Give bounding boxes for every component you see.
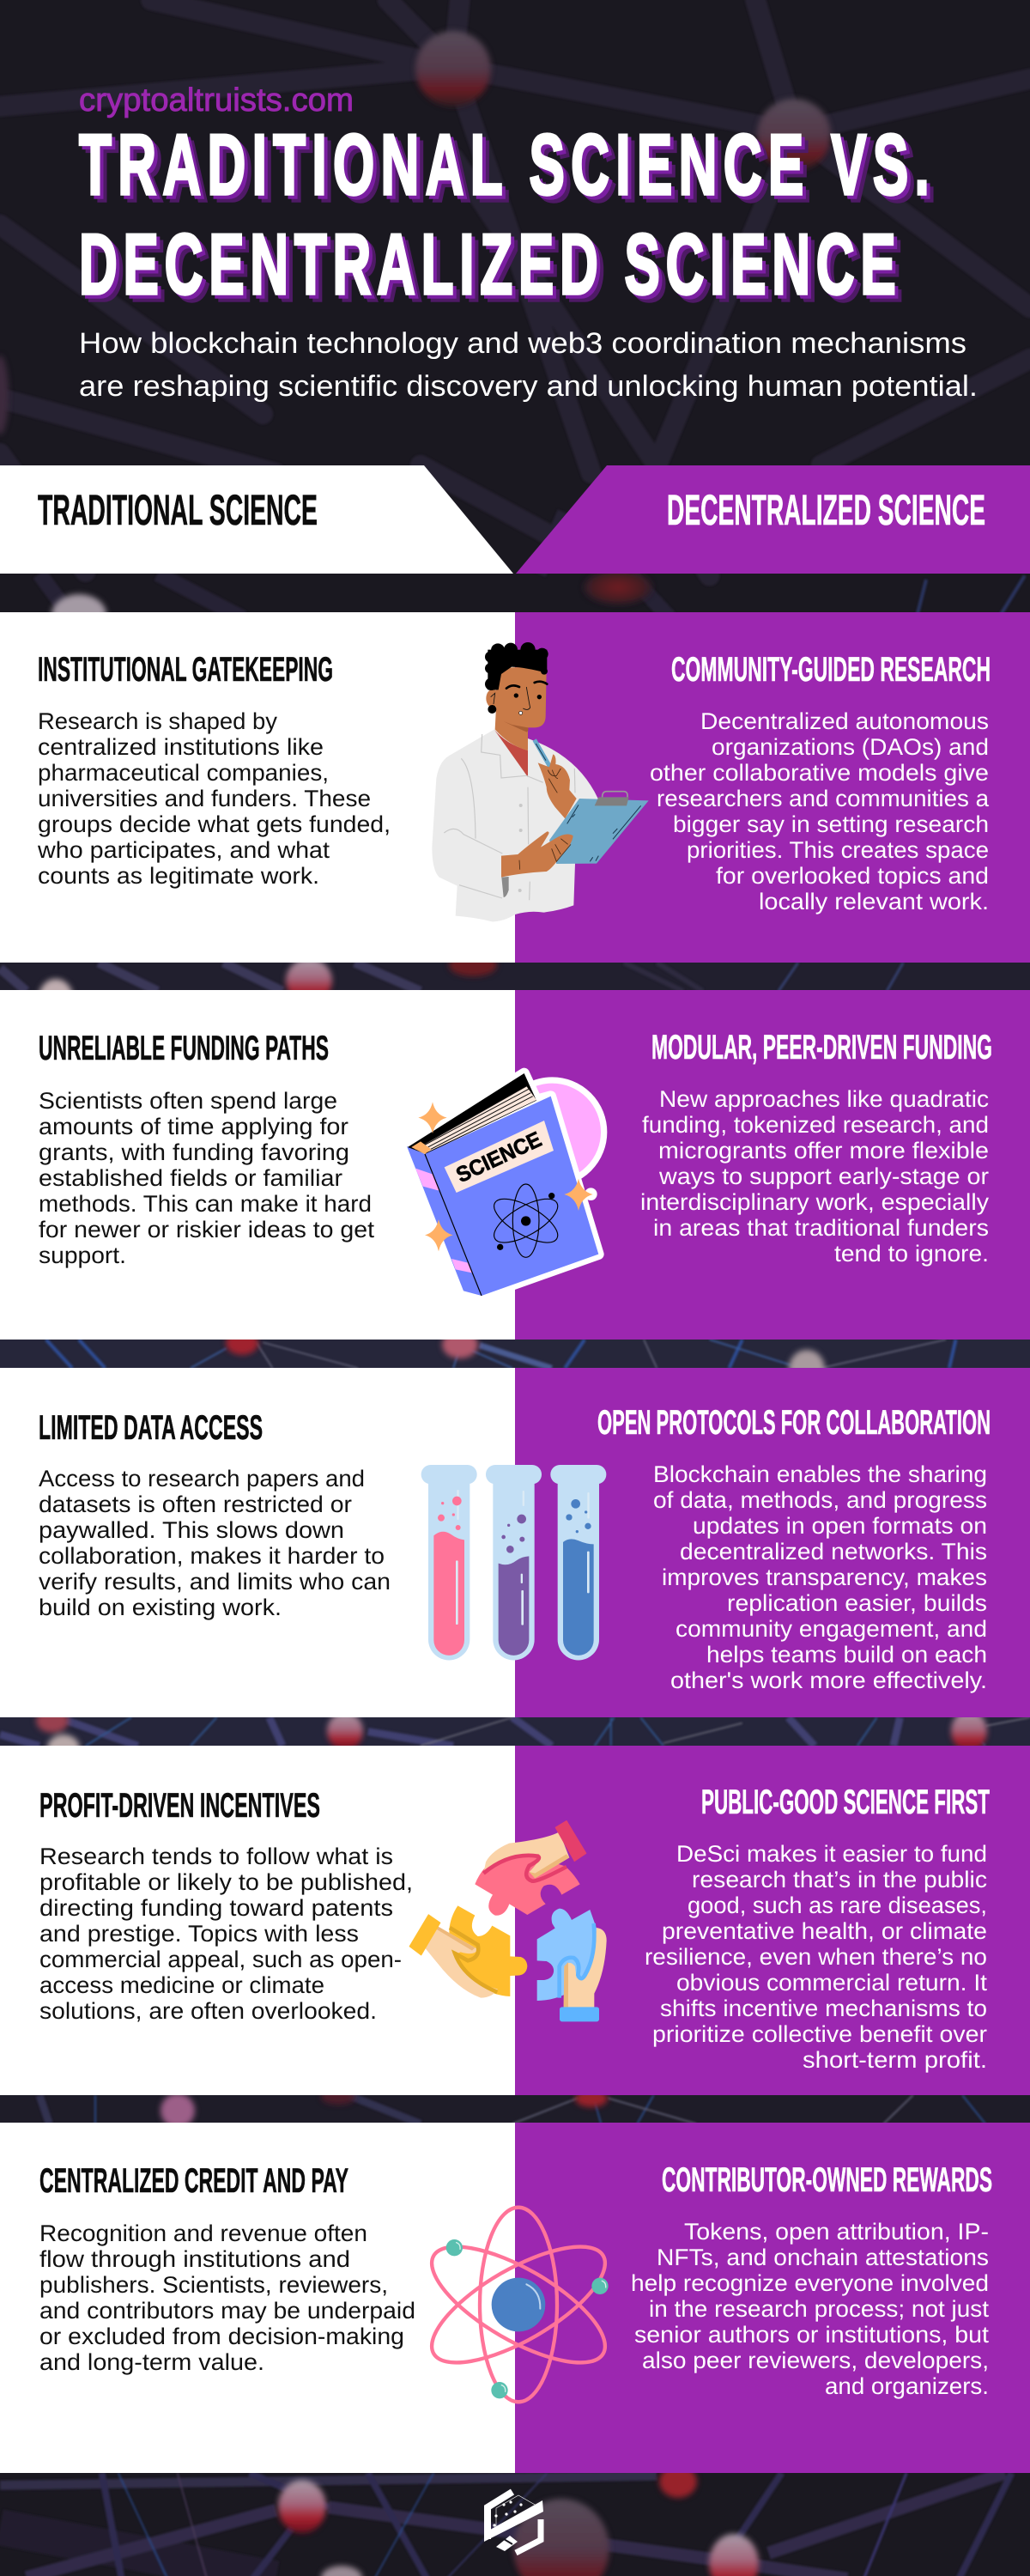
body text — [631, 2219, 990, 2399]
body text: and prestige. Topics with less — [39, 1921, 359, 1947]
body text: collaboration, makes it harder to — [39, 1543, 385, 1569]
website label: cryptoaltruists.com — [79, 82, 354, 118]
body text: verify results, and limits who can — [39, 1569, 391, 1595]
body text: microgrants offer more flexible — [658, 1138, 989, 1163]
body text: NFTs, and onchain attestations — [657, 2245, 989, 2270]
body text: of data, methods, and progress — [653, 1487, 987, 1513]
body text: and contributors may be underpaid — [39, 2298, 415, 2324]
body text: amounts of time applying for — [39, 1114, 348, 1139]
body text: established fields or familiar — [39, 1165, 342, 1191]
test tube: pink — [421, 1465, 477, 1660]
body text: centralized institutions like — [38, 734, 324, 760]
title: DECENTRALIZED SCIENCE — [82, 220, 900, 316]
title: TRADITIONAL SCIENCE VS. — [86, 124, 936, 220]
panel: profit-driven incentives — [0, 1746, 515, 2095]
body text: obvious commercial return. It — [676, 1970, 988, 1996]
body text: improves transparency, makes — [662, 1564, 987, 1590]
body text: build on existing work. — [39, 1595, 282, 1620]
body text: prioritize collective benefit over — [652, 2021, 987, 2047]
heading: INSTITUTIONAL GATEKEEPING — [38, 651, 333, 689]
body text: and organizers. — [825, 2373, 989, 2399]
body text: universities and funders. These — [38, 786, 371, 811]
body text — [645, 1841, 988, 2073]
body text — [37, 708, 391, 889]
body text: other collaborative models give — [650, 760, 989, 786]
icon: science book: SCIENCE — [452, 1127, 545, 1188]
column header: decentralized science — [516, 465, 1030, 574]
body text: Access to research papers and — [39, 1466, 365, 1492]
body text: Recognition and revenue often — [39, 2221, 367, 2246]
body text: flow through institutions and — [39, 2246, 350, 2272]
body text: Research is shaped by — [38, 708, 278, 734]
body text: paywalled. This slows down — [39, 1517, 344, 1543]
body text: in areas that traditional funders — [653, 1215, 989, 1241]
title: DECENTRALIZED SCIENCE — [79, 216, 896, 313]
column header: traditional science: TRADITIONAL SCIENCE — [38, 486, 318, 534]
body text — [39, 2221, 415, 2375]
icon: scientist with clipboard — [432, 642, 649, 921]
subtitle: are reshaping scientific discovery and unlocking human potential. — [79, 370, 978, 403]
body text: counts as legitimate work. — [38, 863, 319, 889]
body text: New approaches like quadratic — [659, 1086, 989, 1112]
body text: resilience, even when there’s no — [645, 1944, 987, 1970]
panel: centralized credit and pay — [0, 2123, 515, 2473]
body text: for newer or riskier ideas to get — [39, 1217, 375, 1242]
body text: Research tends to follow what is — [39, 1844, 393, 1869]
title: TRADITIONAL SCIENCE VS. — [79, 117, 930, 213]
body text: also peer reviewers, developers, — [642, 2348, 989, 2373]
body text: preventative health, or climate — [662, 1918, 987, 1944]
body text: shifts incentive mechanisms to — [660, 1996, 987, 2021]
body text: other's work more effectively. — [670, 1668, 987, 1693]
subtitle — [79, 327, 978, 403]
body text: research that’s in the public — [692, 1867, 987, 1893]
body text: updates in open formats on — [693, 1513, 987, 1539]
body text: Decentralized autonomous — [700, 708, 989, 734]
icon: science book — [406, 1073, 604, 1296]
panel: community-guided research — [515, 612, 1030, 963]
heading: PROFIT-DRIVEN INCENTIVES — [39, 1787, 320, 1825]
body text: replication easier, builds — [727, 1590, 987, 1616]
body text: tend to ignore. — [834, 1241, 989, 1267]
body text: for overlooked topics and — [716, 863, 989, 889]
panel: public-good science first — [515, 1746, 1030, 2095]
body text: profitable or likely to be published, — [39, 1869, 413, 1895]
body text: short-term profit. — [803, 2047, 987, 2073]
body text: senior authors or institutions, but — [634, 2322, 990, 2348]
test tube: purple — [486, 1465, 542, 1660]
body text: bigger say in setting research — [673, 811, 989, 837]
body text: funding, tokenized research, and — [642, 1112, 989, 1138]
body text: methods. This can make it hard — [39, 1191, 372, 1217]
body text: access medicine or climate — [39, 1972, 324, 1998]
test tube: blue — [550, 1465, 606, 1660]
body text — [39, 1088, 375, 1268]
body text: in the research process; not just — [649, 2296, 990, 2322]
body text — [653, 1461, 987, 1693]
body text: publishers. Scientists, reviewers, — [39, 2272, 388, 2298]
title: DECENTRALIZED SCIENCE — [86, 223, 903, 319]
body text: directing funding toward patents — [39, 1895, 393, 1921]
title — [79, 117, 936, 319]
title: TRADITIONAL SCIENCE VS. — [82, 120, 933, 216]
panel: institutional gatekeeping — [0, 612, 515, 963]
panel: limited data access — [0, 1368, 515, 1717]
body text: interdisciplinary work, especially — [640, 1189, 990, 1215]
body text: and long-term value. — [39, 2349, 264, 2375]
body text — [650, 708, 990, 914]
body text — [39, 1466, 391, 1620]
panel: contributor-owned rewards — [515, 2123, 1030, 2473]
body text: grants, with funding favoring — [39, 1139, 349, 1165]
puzzle piece and hand: pink — [475, 1821, 586, 1916]
panel: modular, peer-driven funding — [515, 990, 1030, 1340]
body text: priorities. This creates space — [687, 837, 989, 863]
heading: UNRELIABLE FUNDING PATHS — [39, 1030, 329, 1067]
body text: DeSci makes it easier to fund — [676, 1841, 987, 1867]
heading: LIMITED DATA ACCESS — [39, 1409, 263, 1447]
panel: open protocols for collaboration — [515, 1368, 1030, 1717]
body text: community engagement, and — [676, 1616, 987, 1642]
icon: three test tubes — [421, 1465, 606, 1660]
body text: decentralized networks. This — [680, 1539, 987, 1564]
body text: locally relevant work. — [759, 889, 989, 914]
icon: hands with puzzle pieces — [409, 1821, 607, 2021]
footer logo — [484, 2492, 543, 2553]
body text: commercial appeal, such as open- — [39, 1947, 402, 1972]
body text: good, such as rare diseases, — [688, 1893, 987, 1918]
body text: pharmaceutical companies, — [38, 760, 329, 786]
body text: Scientists often spend large — [39, 1088, 337, 1114]
body text: organizations (DAOs) and — [712, 734, 989, 760]
puzzle piece and hand: blue — [537, 1909, 607, 2021]
icon: atom — [415, 2208, 621, 2402]
body text: helps teams build on each — [706, 1642, 987, 1668]
subtitle: How blockchain technology and web3 coordination mechanisms — [79, 327, 966, 360]
body text — [39, 1844, 413, 2024]
body text: or excluded from decision-making — [39, 2324, 404, 2349]
body text: who participates, and what — [37, 837, 330, 863]
puzzle piece and hand: yellow — [409, 1905, 527, 1998]
body text: ways to support early-stage or — [658, 1163, 989, 1189]
body text: solutions, are often overlooked. — [39, 1998, 377, 2024]
body text — [640, 1086, 990, 1267]
column header: traditional science — [0, 465, 513, 574]
body text: datasets is often restricted or — [39, 1492, 352, 1517]
body text: researchers and communities a — [657, 786, 990, 811]
body text: Tokens, open attribution, IP- — [684, 2219, 989, 2245]
body text: help recognize everyone involved — [631, 2270, 989, 2296]
body text: Blockchain enables the sharing — [653, 1461, 987, 1487]
heading: CENTRALIZED CREDIT AND PAY — [39, 2162, 348, 2200]
body text: support. — [39, 1242, 126, 1268]
body text: groups decide what gets funded, — [38, 811, 391, 837]
panel: unreliable funding paths — [0, 990, 515, 1340]
